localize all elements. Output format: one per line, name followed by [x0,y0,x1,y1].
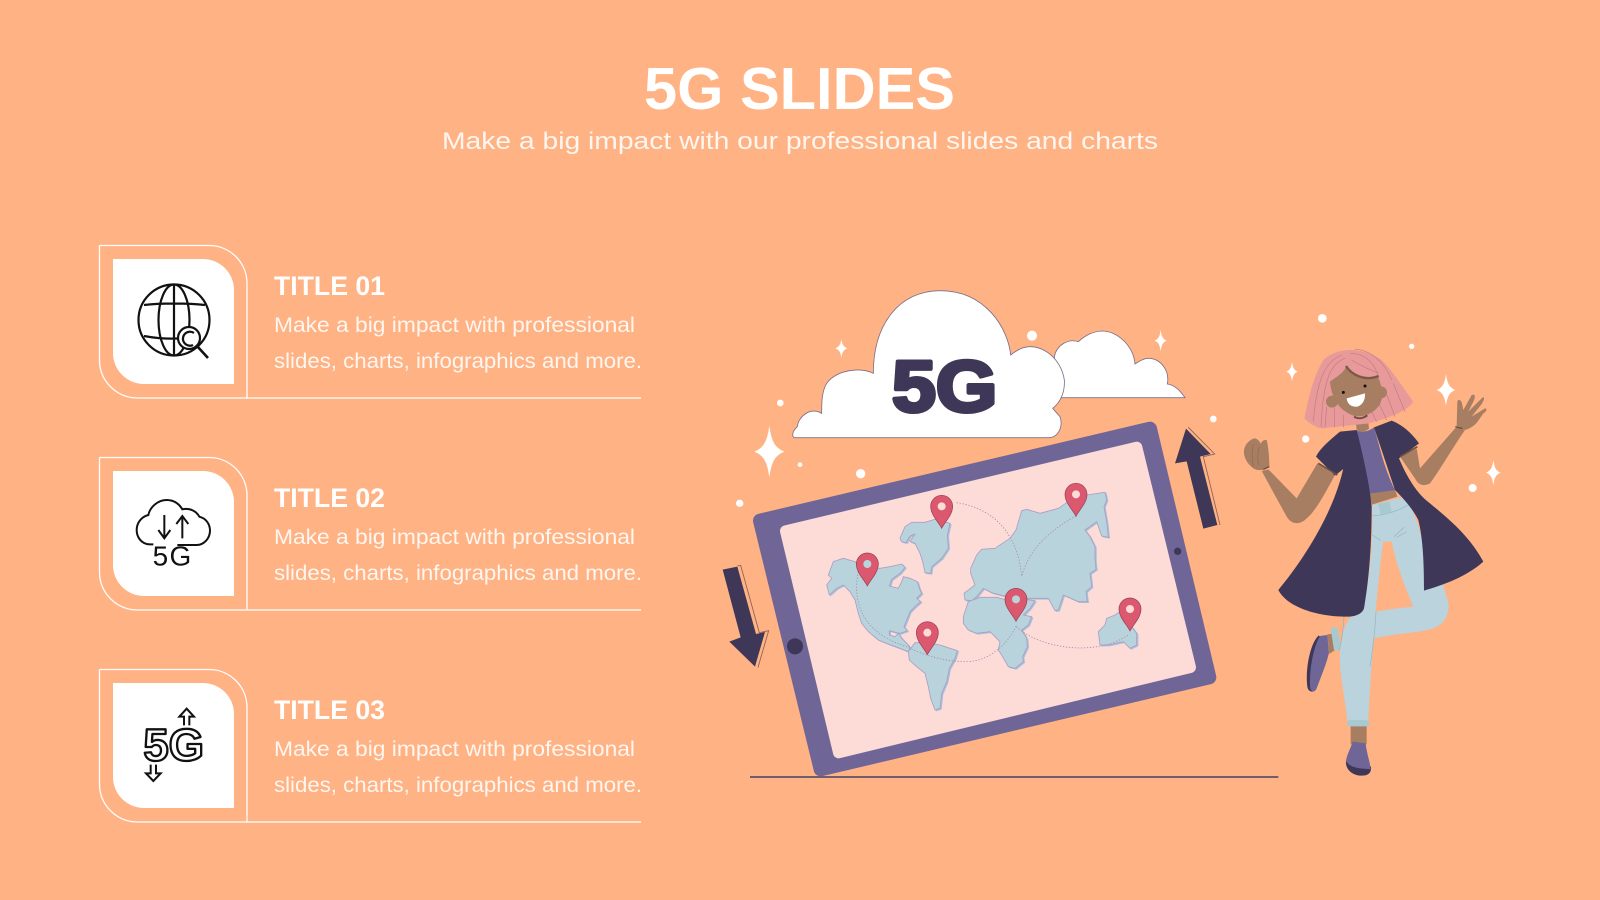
text 02 line 2: slides, charts, infographics and more. [274,562,642,585]
standing foot [1346,720,1371,776]
panel: item 02 [100,458,642,610]
midriff [1369,489,1397,505]
location pins [856,483,1141,655]
panel frame 03 [100,670,641,822]
jeans belt patch [1378,501,1392,514]
text 03 line 2: slides, charts, infographics and more. [274,774,642,797]
icon: globe with magnifier [138,284,210,358]
left arm and fist [1244,438,1335,523]
jeans details [1339,505,1408,667]
hair [1304,350,1413,428]
neck [1355,413,1369,432]
illustration: tablet and clouds [723,291,1278,777]
title: 5G SLIDES [644,56,955,122]
icon tile 03 [113,683,234,808]
panel frame 01 [100,246,641,398]
icon: outlined 5G with arrows: 5G [143,720,204,771]
hair strands [1313,349,1405,427]
world map [827,492,1138,711]
subtitle: Make a big impact with our professional slides and charts [442,128,1158,155]
tablet screen [786,447,1190,753]
icon tile 02 [113,471,234,596]
illustration: woman character [1244,314,1501,776]
panel frame 02 [100,458,641,610]
text 03 line 1: Make a big impact with professional [274,738,635,761]
tablet body [760,429,1209,769]
small cloud [1054,331,1185,398]
icon: cloud with 5G [137,500,210,572]
sparkles and dots [1286,314,1501,492]
purple top [1357,427,1395,494]
title 01: TITLE 01 [274,271,385,301]
text 01 line 2: slides, charts, infographics and more. [274,350,642,373]
panel: item 01 [100,246,642,398]
bent leg [1367,533,1449,640]
large cloud [793,291,1064,438]
tablet buttons [787,548,1181,654]
title 03: TITLE 03 [274,695,385,725]
arrow: up [1175,427,1220,529]
5G cloud label: 5G [892,347,997,427]
right arm and waving hand [1400,395,1486,485]
text 02 line 1: Make a big impact with professional [274,526,635,549]
ground line [750,774,1278,779]
icon: cloud with 5G: 5G [153,541,194,572]
sleeve hems [1318,447,1417,475]
face [1326,366,1387,418]
title 02: TITLE 02 [274,483,385,513]
arrow: down [723,565,769,667]
panel: item 03 [100,670,642,822]
coat left side [1278,430,1372,617]
connection routes [857,503,1128,662]
text 01 line 1: Make a big impact with professional [274,314,635,337]
sparkles and dots [736,330,1217,507]
standing leg [1340,497,1424,721]
coat right side [1374,421,1483,591]
raised foot [1307,627,1341,692]
icon tile 01 [113,259,234,384]
